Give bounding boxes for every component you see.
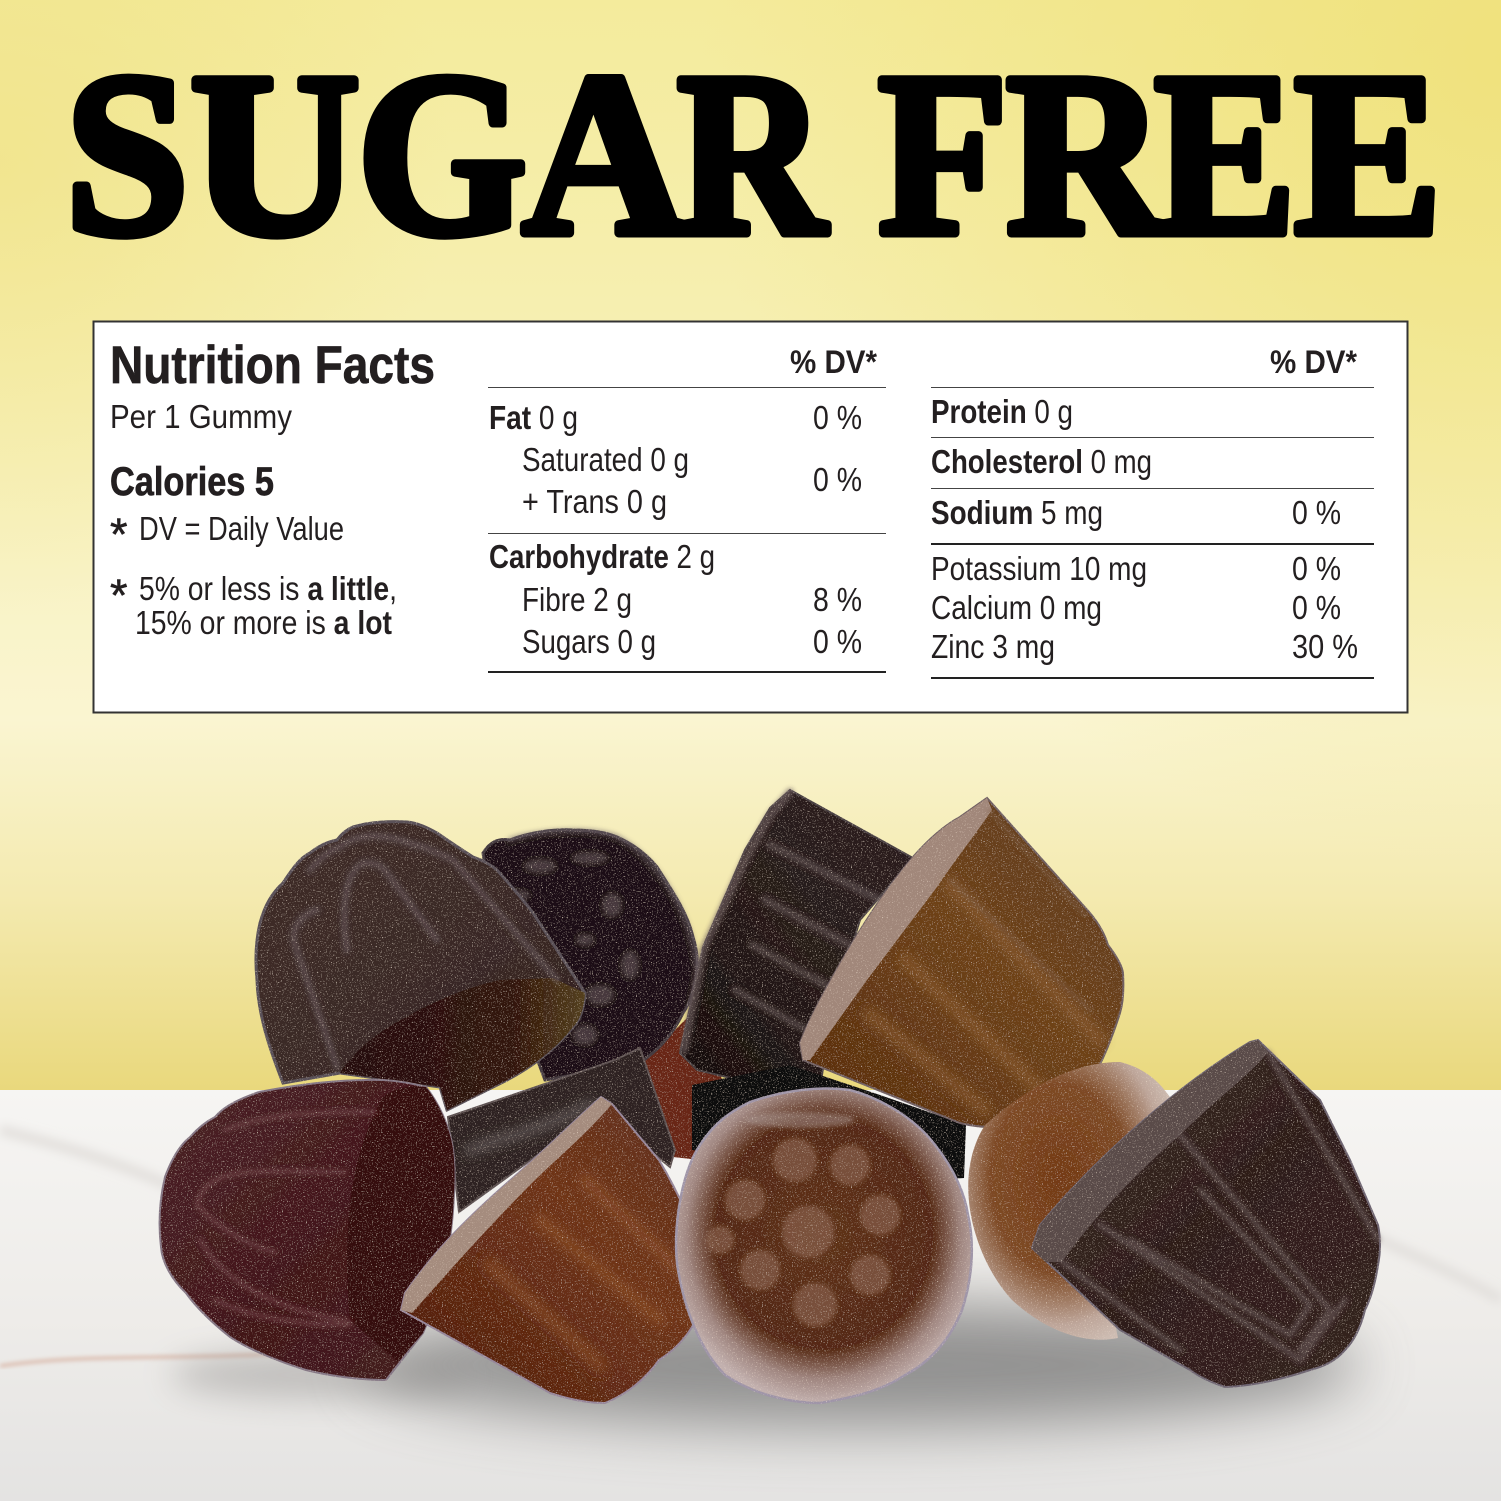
title <box>65 24 1442 284</box>
middle column: fat and carbohydrate: Saturated 0 g <box>522 441 689 478</box>
background: marble table <box>0 1090 1501 1501</box>
right column: protein and minerals: 0 % <box>1292 589 1341 626</box>
middle column: fat and carbohydrate: + Trans 0 g <box>522 483 667 520</box>
title: R <box>677 24 829 284</box>
left column: serving and legend: 15% or more is a lot <box>135 604 392 641</box>
left column: serving and legend: * <box>110 570 128 621</box>
gummy: dark cup back centre <box>680 790 913 1088</box>
right column: protein and minerals: 30 % <box>1292 628 1358 665</box>
middle column: fat and carbohydrate: 0 % <box>813 399 862 436</box>
middle column: fat and carbohydrate <box>488 344 886 673</box>
gummy: amber cup right of centre <box>800 798 1123 1127</box>
panel: nutrition facts <box>94 322 1408 712</box>
title: E <box>1294 24 1442 284</box>
gummy: dark cup far right <box>1032 1040 1380 1387</box>
right column: protein and minerals: Zinc 3 mg <box>931 628 1055 665</box>
right column: protein and minerals: Cholesterol 0 mg <box>931 443 1152 480</box>
gummy: dark brown cup top left <box>256 822 585 1110</box>
left column: serving and legend: 5% or less is a little, <box>139 570 397 607</box>
gummy: round raspberry front <box>676 1088 972 1403</box>
title: F <box>878 24 1008 284</box>
right column: protein and minerals: 0 % <box>1292 494 1341 531</box>
illustration: pile of gummies <box>160 790 1380 1403</box>
title: A <box>522 24 687 284</box>
left column: serving and legend <box>110 336 435 641</box>
middle column: fat and carbohydrate: Carbohydrate 2 g <box>489 538 715 575</box>
title: U <box>190 24 360 284</box>
middle column: fat and carbohydrate: 0 % <box>813 623 862 660</box>
gummy: dark piece behind round gummy <box>692 1065 966 1182</box>
title: G <box>357 24 527 284</box>
middle column: fat and carbohydrate: Sugars 0 g <box>522 623 656 660</box>
right column: protein and minerals: Sodium 5 mg <box>931 494 1103 531</box>
background: yellow gradient wall <box>0 0 1501 1091</box>
right column: protein and minerals: Protein 0 g <box>931 393 1073 430</box>
gummy: blackberry back left <box>483 830 697 1080</box>
middle column: fat and carbohydrate: Fat 0 g <box>489 399 578 436</box>
title: S <box>65 24 189 284</box>
right column: protein and minerals <box>931 344 1374 679</box>
left column: serving and legend: Per 1 Gummy <box>110 398 292 435</box>
middle column: fat and carbohydrate: Fibre 2 g <box>522 581 632 618</box>
title: E <box>1154 24 1296 284</box>
middle column: fat and carbohydrate: 8 % <box>813 581 862 618</box>
gummy: maroon cup left <box>160 1080 455 1380</box>
left column: serving and legend: * <box>110 509 128 560</box>
right column: protein and minerals: Calcium 0 mg <box>931 589 1102 626</box>
gummy: reddish piece in centre back <box>640 1015 725 1160</box>
middle column: fat and carbohydrate: % DV* <box>790 344 878 380</box>
gummy: dark piece behind orange cup <box>448 1048 675 1212</box>
gummy: orange-brown cup front <box>401 1097 707 1403</box>
middle column: fat and carbohydrate: 0 % <box>813 461 862 498</box>
right column: protein and minerals: 0 % <box>1292 550 1341 587</box>
title: R <box>1006 24 1169 284</box>
left column: serving and legend: Nutrition Facts <box>110 336 435 395</box>
right column: protein and minerals: % DV* <box>1270 344 1358 380</box>
right column: protein and minerals: Potassium 10 mg <box>931 550 1147 587</box>
gummy: round gummy back right <box>968 1062 1172 1340</box>
left column: serving and legend: DV = Daily Value <box>139 510 344 547</box>
left column: serving and legend: Calories 5 <box>110 460 274 504</box>
